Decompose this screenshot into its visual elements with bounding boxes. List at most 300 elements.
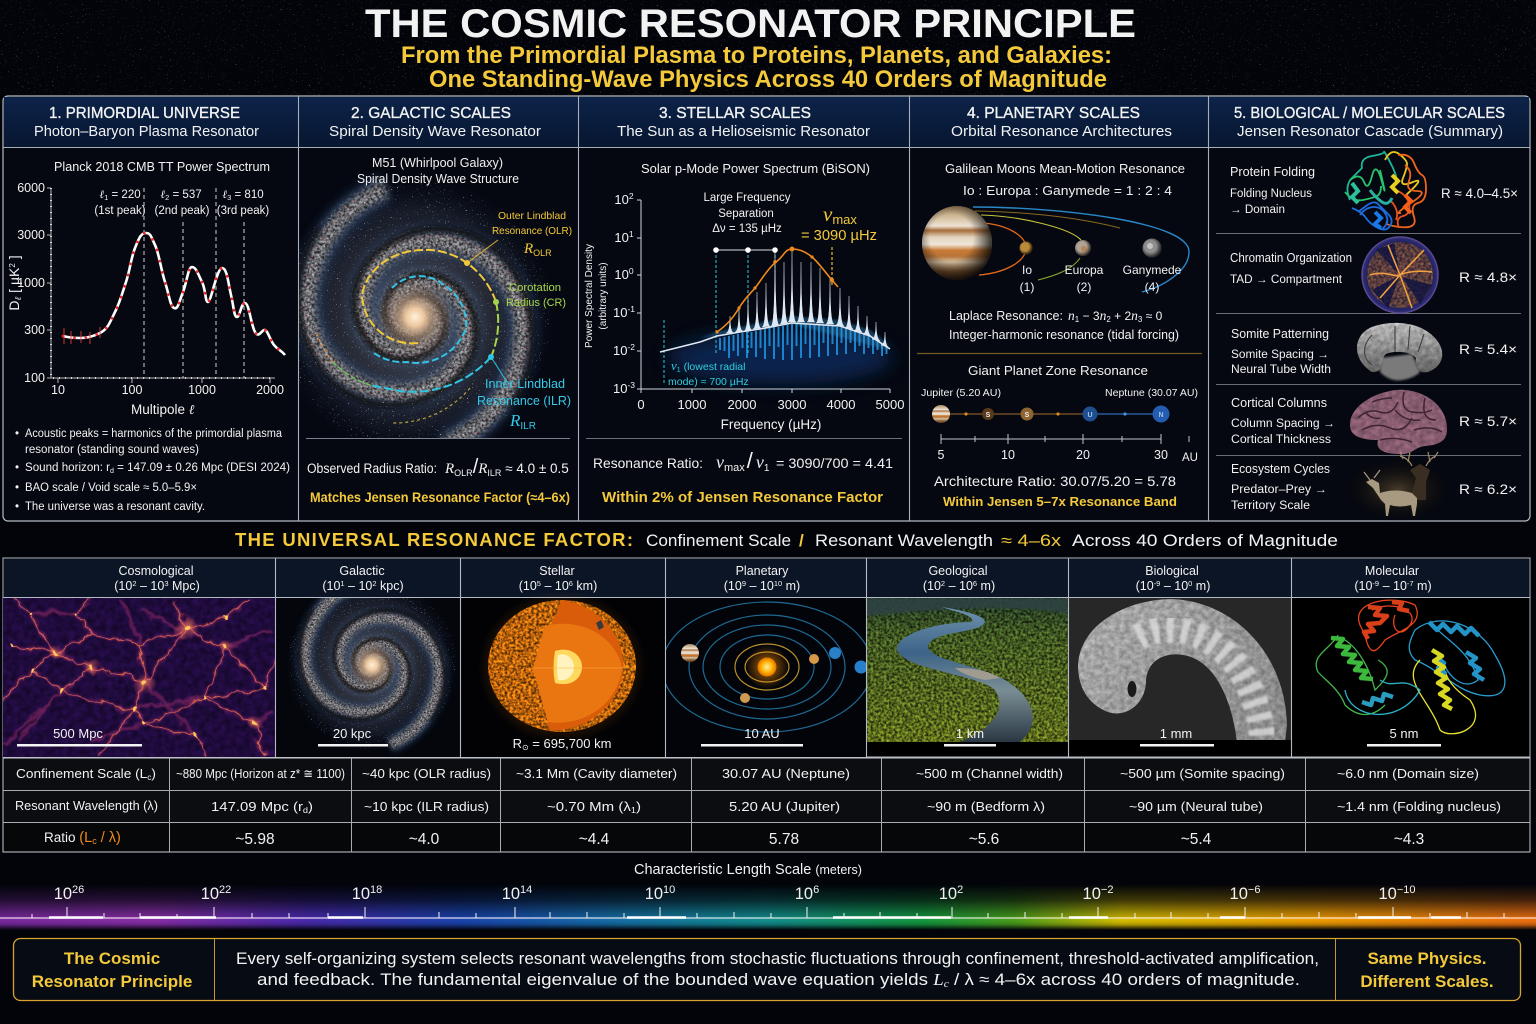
row: ratio [44,830,1424,848]
column headers: – 10 [1160,579,1188,593]
chart: CMB power spectrum: 2000 [256,383,284,397]
diagram: giant planet scale: N [1158,412,1164,419]
row: protein folding: Folding Nucleus [1230,188,1312,200]
chart: CMB power spectrum [6,181,285,417]
row: resonant wavelength: ~0.70 Mm (λ [547,799,620,814]
icon: somite embryo [1357,323,1442,380]
chart: solar p-mode spectrum: ν [671,358,677,373]
row: resonant wavelength: ~10 kpc (ILR radius) [364,799,489,814]
image: sun cutaway: = 695,700 km [529,736,611,751]
image: galaxy: 20 kpc [333,726,372,741]
row: confinement scale: ~6.0 nm (Domain size) [1337,766,1479,781]
length scale axis [0,862,1536,930]
row: ecosystem cycles: Predator–Prey → [1231,484,1327,496]
observed radius ratio [307,456,569,478]
column headers: -9 [1372,579,1379,588]
bullet list: The universe was a resonant cavity. [25,501,205,513]
chart: CMB power spectrum: ℓ [160,189,165,201]
diagram: moon orbits: Ganymede [1123,263,1182,277]
jensen note: Within Jensen 5–7x Resonance Band [943,494,1177,509]
chart: CMB power spectrum: 1000 [188,383,216,397]
heading: panel 1 [34,105,259,140]
row: confinement scale: c [147,773,151,782]
resonance ratio: 1 [764,463,770,474]
diagram: giant planet scale: 10 [1001,448,1015,462]
row: confinement scale: ~40 kpc (OLR radius) [362,766,491,781]
chart: CMB power spectrum: 1 [104,193,108,202]
scale gallery strip [0,558,1530,757]
chart: solar p-mode spectrum: 2000 [728,397,756,412]
subtitle: From the Primordial Plasma to Proteins, Planets, and Galaxies: [401,42,1112,69]
label: corotation radius [506,282,566,309]
icon: Jupiter [922,206,992,280]
row: somite patterning: Somite Spacing → [1231,349,1329,361]
column headers: -9 [1154,579,1160,588]
column headers: 2 [132,579,137,588]
chart: CMB power spectrum: = 537 [169,189,202,201]
axis labels: 10 [352,885,370,903]
resonance ratio: / [747,448,754,473]
image: sun cutaway: ⊙ [522,743,529,752]
Laplace resonance text: ≈ 0 [1142,309,1163,323]
Laplace resonance text: 2 [1106,315,1111,324]
column headers: (10 [724,579,742,593]
title: THE COSMIC RESONATOR PRINCIPLE [365,2,1136,46]
row: confinement scale: ~500 m (Channel width) [916,766,1063,781]
chart: CMB power spectrum: 3 [227,193,231,202]
diagram: moon orbits: (2) [1077,280,1091,294]
diagram: giant planet scale: Jupiter (5.20 AU) [921,387,1001,399]
row: somite patterning: Neural Tube Width [1231,364,1331,376]
heading: panel 3 [617,105,870,140]
row: resonant wavelength [15,798,1501,815]
row: confinement scale: Confinement Scale (L [16,766,141,781]
heading: universal resonance factor: Resonant Wavelength [815,532,993,550]
column headers: Galactic [339,564,385,578]
chart: solar p-mode spectrum: 0 [629,266,634,276]
axis labels: 10 [502,885,520,903]
icon: Io [1020,242,1032,254]
Laplace resonance text: 3 [1138,315,1143,324]
heading: panel 3: 3. STELLAR SCALES [659,105,811,122]
row: cortical columns: Cortical Columns [1231,396,1327,410]
resonance ratio: ν [716,452,724,472]
panel 3: stellar scales [584,105,904,506]
heading: panel 1: Photon–Baryon Plasma Resonator [34,124,259,140]
footer: principle name: Resonator Principle [32,972,192,991]
subheading: giant planets: Giant Planet Zone Resonance [968,364,1148,378]
label: corotation radius: Corotation [509,282,561,294]
column headers: 2 [941,579,945,588]
axis labels: 10 [645,885,663,903]
column headers: 5 [537,579,541,588]
label: inner Lindblad resonance [477,377,571,432]
observed radius ratio: R [477,461,487,477]
axis labels: 18 [370,884,382,896]
chart: CMB power spectrum: ] [6,255,22,263]
observed radius ratio: R [445,461,454,477]
label: outer Lindblad resonance: Outer Lindblad [498,210,566,222]
column headers: Planetary [736,564,789,578]
column headers: Geological [928,564,988,578]
row: protein folding: Protein Folding [1230,165,1315,179]
row: somite patterning [1231,323,1517,380]
column headers: – 10 [137,579,164,593]
Laplace resonance text: 1 [1075,315,1080,324]
chart: CMB power spectrum: ℓ [222,189,227,201]
column headers: 6 [973,579,977,588]
axis labels: 10 [1230,885,1248,903]
footer: tagline: Different Scales. [1360,972,1494,991]
column headers: (10 [1354,579,1372,593]
icon: Europa [1075,240,1091,256]
column headers: 2 [372,579,377,588]
chart: solar p-mode spectrum: 10 [614,230,629,245]
chart: CMB power spectrum: (3rd peak) [217,205,269,217]
footer: statement: Every self-organizing system selects resonant wavelengths from stochastic fluctuations through confinement, threshold-activated amplification, [236,950,1319,968]
diagram: giant planet scale: U [1087,412,1093,419]
chart: CMB power spectrum: 100 [122,383,142,397]
row: cortical columns: R ≈ 5.7× [1459,413,1517,429]
row: ratio: ~5.4 [1181,831,1212,848]
row: chromatin organization: TAD → Compartment [1230,274,1343,286]
row: resonant wavelength: Resonant Wavelength (λ) [15,798,158,813]
row: ratio: ~5.98 [235,831,275,848]
chart: solar p-mode spectrum: = 3090 µHz [801,228,877,244]
label: outer Lindblad resonance: Resonance (OLR) [492,225,572,237]
Laplace resonance text: + 2 [1111,309,1131,323]
label: inner Lindblad resonance: ILR [520,421,536,432]
observed radius ratio: ≈ 4.0 ± 0.5 [501,461,569,476]
row: ecosystem cycles: R ≈ 6.2× [1459,481,1517,497]
bullet list: resonator (standing sound waves) [25,444,199,456]
row: ecosystem cycles: Ecosystem Cycles [1231,462,1330,476]
footer: statement: / λ ≈ 4–6x across 40 orders of magnitude. [949,971,1300,989]
row: protein folding: → Domain [1230,204,1285,216]
row: resonant wavelength: ) [308,799,313,814]
column headers: Mpc) [168,579,200,593]
row: confinement scale: 30.07 AU (Neptune) [722,766,850,781]
chart: solar p-mode spectrum: 2 [629,191,634,201]
chart: CMB power spectrum: 100 [24,371,45,385]
bullet list: Sound horizon: r [25,462,109,474]
architecture ratio: Architecture Ratio: 30.07/5.20 = 5.78 [934,474,1176,489]
icon: deer [1344,452,1452,522]
diagram: moon orbits: (1) [1020,280,1034,294]
marker dots [464,260,499,360]
axis labels: −6 [1248,884,1260,896]
chart: solar p-mode spectrum: Large Frequency [704,192,791,204]
row: ratio: ~4.0 [409,831,440,848]
column headers: km) [573,579,597,593]
icon: brain [1350,390,1447,454]
observed radius ratio: ILR [487,468,502,478]
column headers: (10 [923,579,941,593]
column headers: (10 [519,579,537,593]
row: resonant wavelength: 147.09 Mpc (r [211,799,291,814]
jensen note: Within 2% of Jensen Resonance Factor [602,490,883,506]
resonance ratio [593,448,893,474]
footer principle box [14,938,1520,1000]
panel frame: five scale panels [3,96,1530,521]
image: sun cutaway [461,591,665,757]
footer: statement: c [944,979,949,990]
row: ecosystem cycles: Territory Scale [1231,500,1310,512]
row: cortical columns: Cortical Thickness [1231,434,1331,446]
resonance ratio: = 3090/700 = 4.41 [776,455,893,471]
chart: solar p-mode spectrum: 1 [629,229,634,239]
row: confinement scale: ) [151,766,156,781]
chart: solar p-mode spectrum: (arbitrary units) [598,262,609,330]
row: chromatin organization [1230,237,1517,313]
chart: solar p-mode spectrum: 10 [614,192,629,207]
bullet list: • [15,428,19,440]
resonance ratio: Resonance Ratio: [593,455,703,471]
footer: tagline [1360,949,1494,991]
Laplace resonance text: n [1131,308,1138,323]
heading: universal resonance factor: Across 40 Orders of Magnitude [1072,532,1338,550]
label: inner Lindblad resonance: Resonance (ILR) [477,394,571,408]
heading: panel 2: 2. GALACTIC SCALES [351,105,511,122]
column headers: (10 [114,579,132,593]
label: outer Lindblad resonance: OLR [533,248,552,258]
chart: solar p-mode spectrum: -3 [627,380,635,390]
axis labels: 2 [957,884,963,896]
Laplace resonance text: n [1068,308,1075,323]
image: cosmic web [0,598,275,757]
heading: universal resonance factor [235,529,1338,550]
row: confinement scale: ~880 Mpc (Horizon at z* ≅ 1100) [176,766,345,781]
heading: universal resonance factor: / [799,531,804,550]
heading: universal resonance factor: ≈ 4–6x [1001,532,1062,550]
row: protein folding [1230,152,1518,230]
footer: principle name [32,949,192,991]
heading: panel 1: 1. PRIMORDIAL UNIVERSE [49,105,240,122]
diagram: giant planet scale: S [986,412,991,419]
label: outer Lindblad resonance [492,210,572,258]
observed radius ratio: OLR [454,468,473,478]
chart: solar p-mode spectrum [584,191,904,432]
row: confinement scale: ~500 µm (Somite spacing) [1120,766,1285,781]
row: resonant wavelength: ) [636,799,641,814]
heading: panel 5 [1234,105,1505,140]
axis labels: 22 [219,884,231,896]
galaxy caption [357,156,519,186]
axis labels: 10 [54,885,72,903]
image: river landscape [866,598,1068,746]
row: ratio: ~4.3 [1394,831,1424,848]
heading: panel 5: Jensen Resonator Cascade (Summary) [1237,124,1503,140]
axis labels: −10 [1397,884,1416,896]
chart: CMB power spectrum: 6000 [17,181,45,195]
column headers: Cosmological [118,564,194,578]
column headers: 9 [742,579,746,588]
column headers: – 10 [945,579,973,593]
label: inner Lindblad resonance: R [510,411,520,430]
row: ratio: Ratio (L [44,830,92,846]
panel 2: galactic scales [299,106,572,505]
column headers: kpc) [377,579,404,593]
column headers: 0 [1188,579,1192,588]
icon: Ganymede [1142,238,1162,258]
diagram: giant planet scale: AU [1182,452,1198,464]
resonance ratio: max [724,462,745,474]
column headers: (10 [322,579,340,593]
column headers [114,564,1432,593]
bullet list: BAO scale / Void scale ≈ 5.0–5.9× [25,482,197,494]
column headers: m) [1192,579,1210,593]
axis labels: 10 [795,885,813,903]
column headers: m) [977,579,995,593]
icon: folded protein [1345,152,1426,230]
chart: CMB power spectrum: ℓ [99,189,104,201]
row: resonant wavelength: 1 [631,806,637,815]
chart: CMB power spectrum: (1st peak) [94,205,146,217]
chart: CMB power spectrum: Multipole ℓ [131,402,195,417]
heading: panel 2 [329,105,541,140]
row: confinement scale: ~3.1 Mm (Cavity diameter) [516,766,677,781]
bullet list: d [110,468,114,475]
jensen note: Matches Jensen Resonance Factor (≈4–6x) [310,490,570,505]
image: solar system: 10 AU [744,726,780,741]
heading: panel 4 [951,105,1172,140]
chart: solar p-mode spectrum: 10 [613,305,627,320]
heading: panel 3: The Sun as a Helioseismic Resonator [617,124,870,140]
axis ticks [32,907,1504,918]
diagram: giant planet scale: 5 [938,448,945,462]
chart title: Planck 2018 CMB TT Power Spectrum [54,160,270,174]
chart: solar p-mode spectrum: ν [823,202,832,226]
chart: CMB power spectrum: D [6,300,22,311]
row: resonant wavelength: ~90 m (Bedform λ) [927,799,1045,814]
row: ratio: 5.78 [769,831,799,848]
image: embryo micrograph: 1 mm [1160,726,1192,741]
row: cortical columns [1231,390,1517,454]
axis labels: 10 [1378,885,1397,903]
row: resonant wavelength: ~1.4 nm (Folding nucleus) [1337,799,1501,814]
image: embryo micrograph [1068,598,1291,746]
column headers: Biological [1145,564,1199,578]
row: somite patterning: Somite Patterning [1231,327,1329,341]
image: cosmic web: 500 Mpc [53,726,103,741]
row: ratio: ~5.6 [969,831,999,848]
image: protein ribbon: 5 nm [1390,726,1418,741]
subtitle [401,42,1112,93]
chart: solar p-mode spectrum: Δν = 135 µHz [712,223,782,235]
Laplace resonance text: n [1100,308,1107,323]
chart: solar p-mode spectrum: 0 [637,397,645,412]
image: sun cutaway: R [513,736,522,751]
diagram: giant planet scale: 30 [1154,448,1168,462]
row: protein folding: R ≈ 4.0–4.5× [1441,185,1518,201]
bullet list [15,428,290,513]
panel 5: biological and molecular scales [1216,105,1521,522]
heading: panel 4: 4. PLANETARY SCALES [967,105,1140,122]
row: chromatin organization: R ≈ 4.8× [1459,269,1517,285]
axis labels: 6 [813,884,819,896]
column headers: – 10 [1379,579,1407,593]
Laplace resonance text: Laplace Resonance: [949,309,1063,323]
chart: solar p-mode spectrum: 10 [613,381,627,396]
observed radius ratio: / [473,456,479,478]
chart: solar p-mode spectrum: Separation [718,208,774,220]
footer: tagline: Same Physics. [1367,949,1487,968]
row: confinement scale [16,766,1479,782]
chart: CMB power spectrum: ℓ [13,296,23,300]
row: chromatin organization: Chromatin Organization [1230,251,1352,265]
chart: solar p-mode spectrum: 4000 [827,397,855,412]
rainbow band [0,884,1536,930]
chart: CMB power spectrum: 3000 [17,228,45,242]
column headers: 3 [164,579,168,588]
row: ratio: / λ) [97,830,121,846]
chart: CMB power spectrum: = 220 [108,189,141,201]
heading: panel 4: Orbital Resonance Architectures [951,124,1172,140]
column headers: – 10 [746,579,774,593]
heading: panel 2: Spiral Density Wave Resonator [329,124,541,140]
chart: CMB power spectrum: 1000 [17,276,45,290]
column headers: 1 [340,579,345,588]
row: cortical columns: Column Spacing → [1231,418,1335,430]
chart: solar p-mode spectrum: Power Spectral Density [584,244,595,348]
row: resonant wavelength: ~90 µm (Neural tube) [1129,799,1263,814]
Laplace resonance text: − 3 [1079,309,1100,323]
bullet list: = 147.09 ± 0.26 Mpc (DESI 2024) [114,462,290,474]
column headers: 6 [569,579,573,588]
subheading: Galilean moons: Io : Europa : Ganymede = 1 : 2 : 4 [963,183,1172,198]
row: somite patterning: R ≈ 5.4× [1459,341,1517,357]
bullet list: Acoustic peaks = harmonics of the primordial plasma [25,428,283,440]
chart: CMB power spectrum: = 810 [231,189,264,201]
chart: CMB power spectrum: [ µK [6,267,22,297]
row: ratio: c [92,836,97,846]
image: solar system [662,598,872,757]
diagram: moon orbits: Europa [1065,263,1104,277]
heading: universal resonance factor: Confinement Scale [646,532,791,550]
chart: solar p-mode spectrum: Frequency (µHz) [721,417,821,432]
bullet list: • [15,501,19,513]
chart: solar p-mode spectrum: mode) ≈ 700 µHz [668,376,749,388]
footer: statement: and feedback. The fundamental eigenvalue of the bounded wave equation yields L [257,970,942,989]
axis labels: −2 [1101,884,1113,896]
column headers: – 10 [541,579,569,593]
axis labels: 10 [1083,885,1101,903]
axis labels: 26 [72,884,84,896]
column headers: (10 [1136,579,1154,593]
subtitle: One Standing-Wave Physics Across 40 Orders of Magnitude [429,66,1107,93]
axis labels: 10 [663,884,675,896]
heading: universal resonance factor: THE UNIVERSAL RESONANCE FACTOR: [235,529,633,550]
label: inner Lindblad resonance: Inner Lindblad [485,377,565,391]
axis labels [54,884,1416,903]
label: outer Lindblad resonance: R [524,241,533,257]
label: corotation radius: Radius (CR) [506,297,566,309]
chart: CMB power spectrum: (2nd peak) [155,205,210,217]
row: resonant wavelength: 5.20 AU (Jupiter) [729,799,840,814]
chart: solar p-mode spectrum: -1 [627,304,635,314]
chart: CMB power spectrum: 10 [51,383,65,397]
resonance overlays [316,240,507,423]
diagram: moon orbits: Io [1022,263,1032,277]
galaxy image [299,174,550,438]
column headers: -7 [1407,579,1414,588]
resonance ratio: ν [756,452,764,472]
observed radius ratio: Observed Radius Ratio: [307,461,437,476]
chart: solar p-mode spectrum: -2 [627,342,635,352]
chart: solar p-mode spectrum: 10 [614,267,629,282]
subheading: Galilean moons [945,162,1185,198]
chart title: Solar p-Mode Power Spectrum (BiSON) [641,162,870,176]
